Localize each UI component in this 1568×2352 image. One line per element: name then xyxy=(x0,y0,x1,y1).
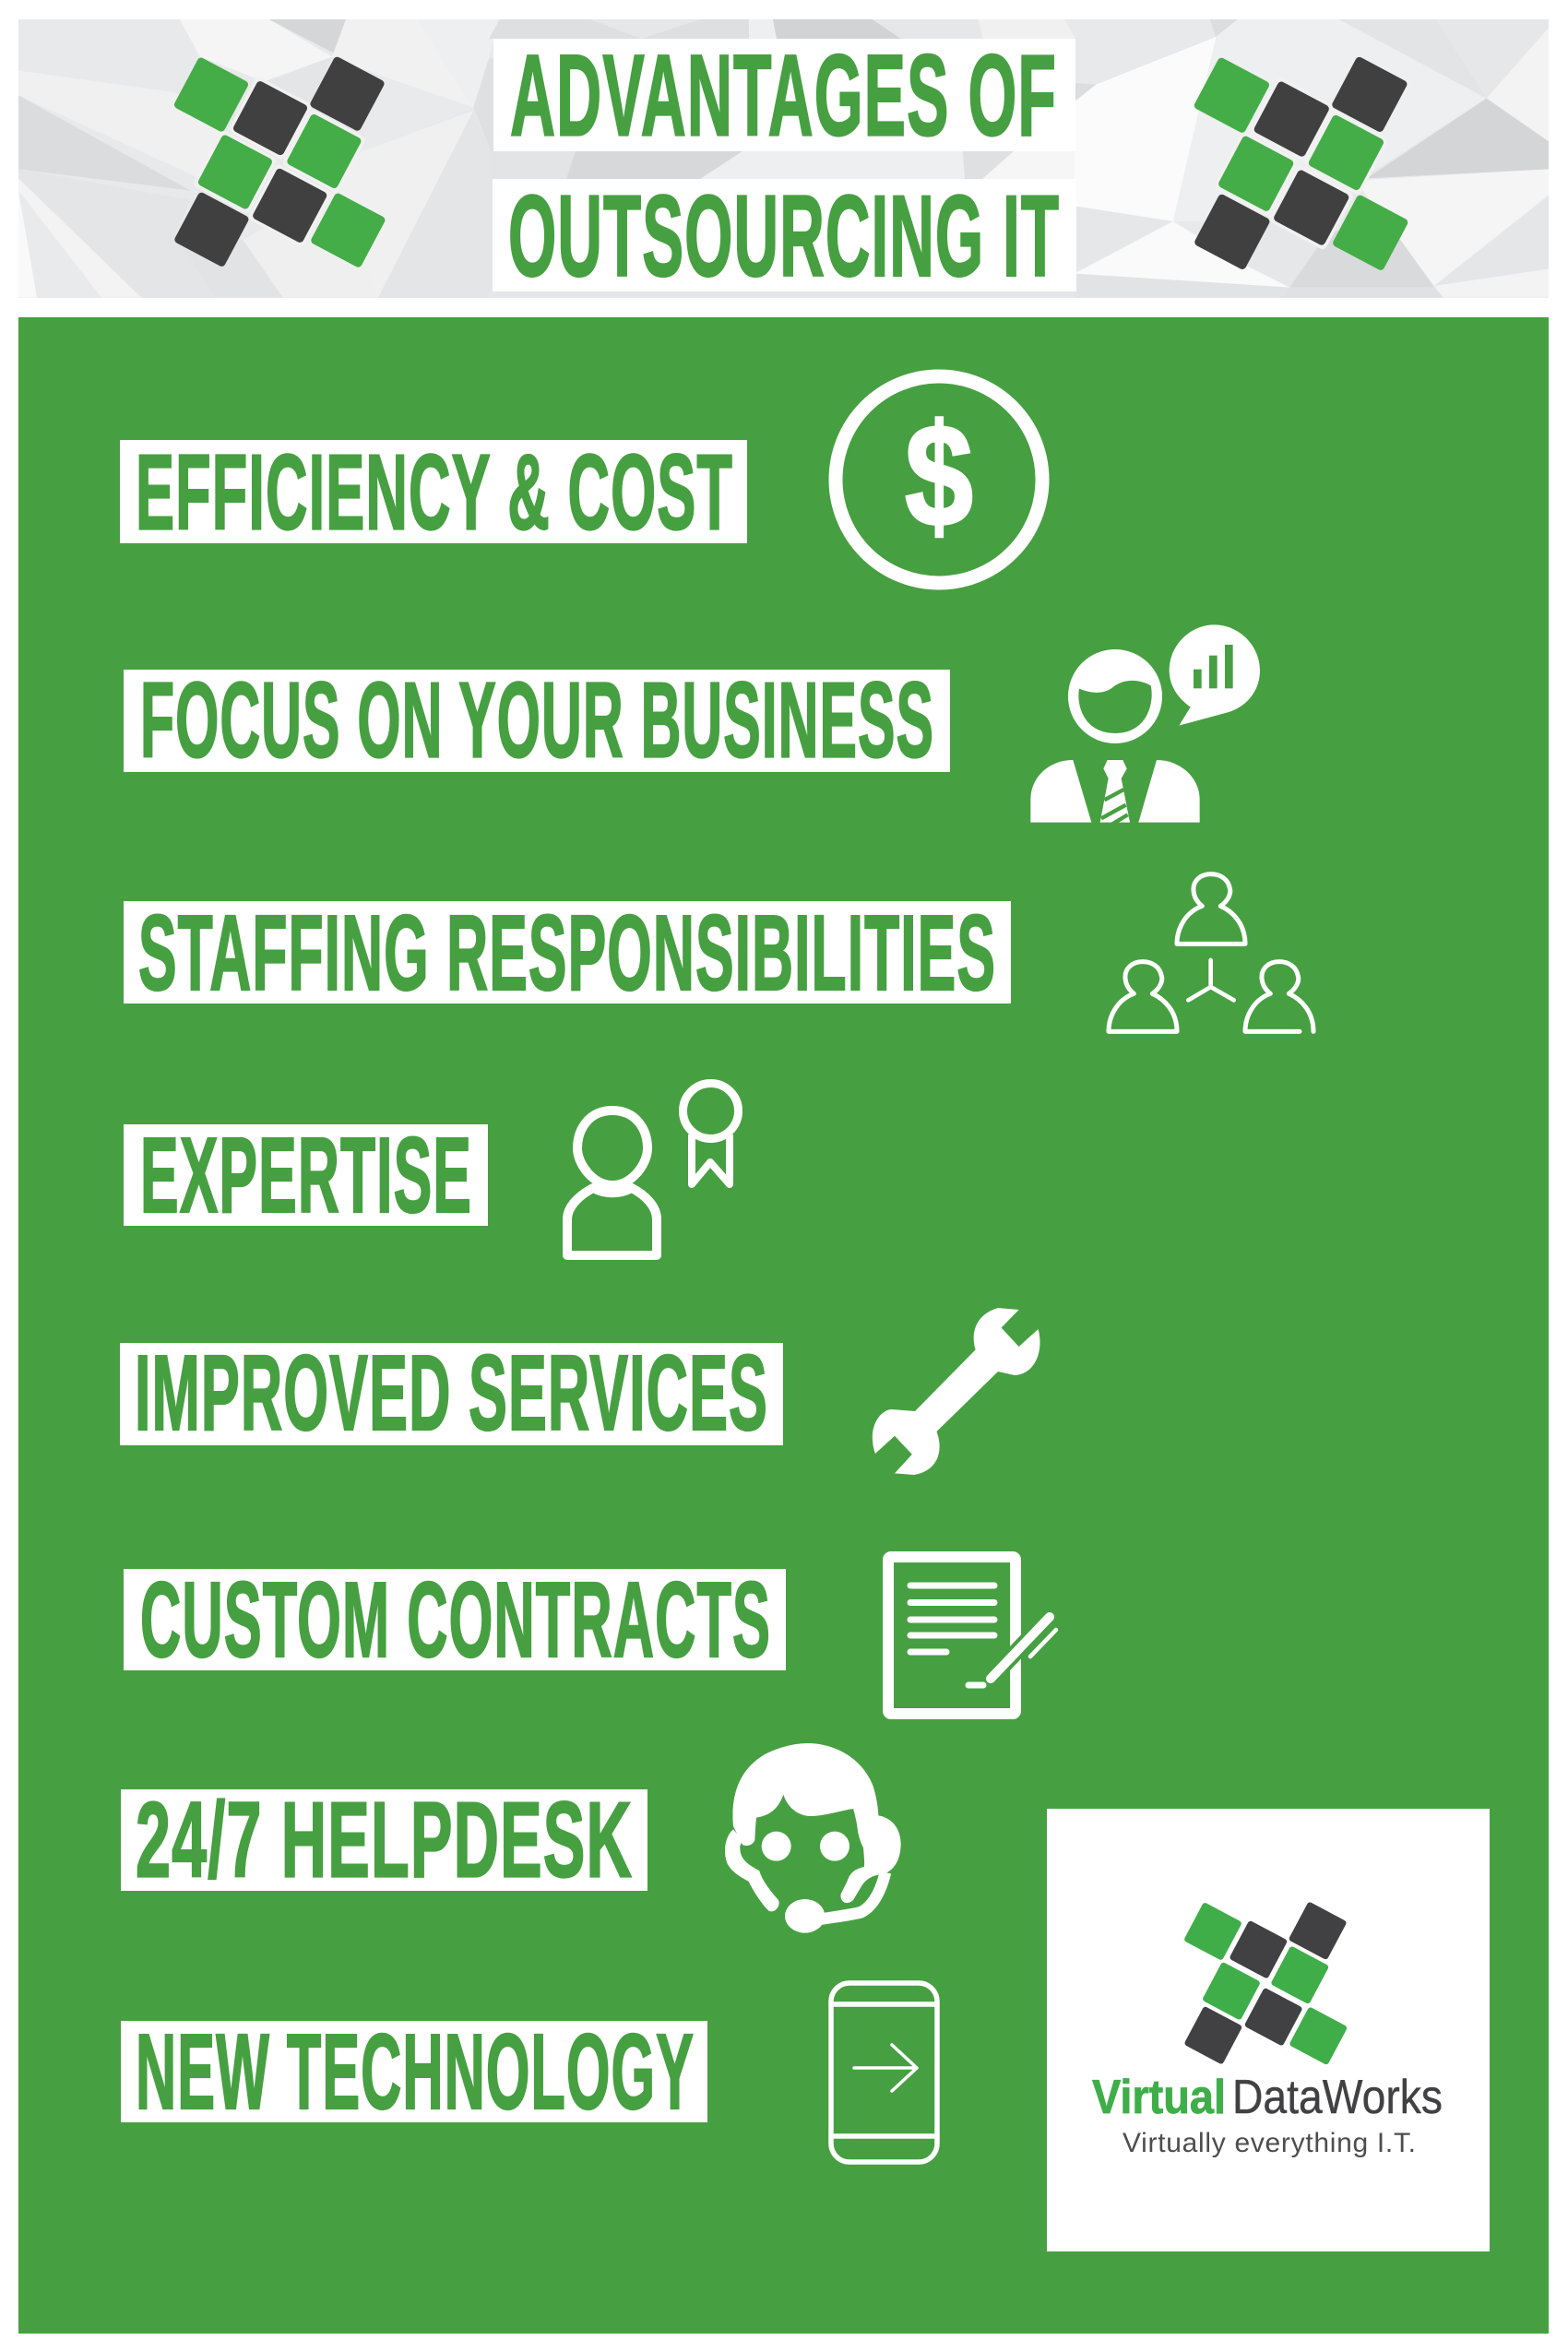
icon: header logo left xyxy=(172,55,386,268)
label: 24/7 helpdesk xyxy=(121,1780,647,1900)
label: staffing responsibilities xyxy=(124,893,1011,1013)
panel: company logo card xyxy=(1047,1809,1490,2251)
title line 1: ADVANTAGES OF xyxy=(510,31,1057,160)
label: custom contracts: CUSTOM CONTRACTS xyxy=(140,1560,771,1680)
label: efficiency and cost: EFFICIENCY & COST xyxy=(136,432,733,552)
label: custom contracts xyxy=(124,1560,786,1680)
icon: header logo right xyxy=(1193,55,1409,271)
label: new technology: NEW TECHNOLOGY xyxy=(136,2012,695,2132)
icon: businessman with chart bubble xyxy=(1030,624,1260,825)
label: improved services: IMPROVED SERVICES xyxy=(135,1333,768,1453)
title line 2: OUTSOURCING IT xyxy=(508,172,1060,301)
header banner xyxy=(18,19,1549,298)
label: expertise: EXPERTISE xyxy=(140,1115,472,1235)
label: focus on your business xyxy=(124,660,950,780)
icon: wrench xyxy=(873,1308,1040,1475)
company tagline: Virtually everything I.T. xyxy=(1123,2128,1416,2158)
icon: phone with arrow xyxy=(831,1983,937,2162)
company name xyxy=(1092,2071,1443,2124)
label: efficiency and cost xyxy=(120,432,747,552)
title line 1 xyxy=(493,31,1075,160)
company name: Virtual xyxy=(1092,2071,1226,2124)
icon: helpdesk agent with headset xyxy=(725,1743,901,1933)
icon: three connected people xyxy=(1109,874,1313,1031)
label: expertise xyxy=(124,1115,488,1235)
label: new technology xyxy=(121,2012,707,2132)
icon: company logo mark xyxy=(1183,1901,1348,2065)
title line 2 xyxy=(493,172,1076,301)
icon: dollar coin: $ xyxy=(905,394,973,557)
company name: DataWorks xyxy=(1232,2071,1443,2124)
label: 24/7 helpdesk: 24/7 HELPDESK xyxy=(136,1780,633,1900)
icon: contract and pen xyxy=(888,1557,1056,1714)
icon: expert person with ribbon xyxy=(567,1083,738,1255)
label: improved services xyxy=(120,1333,783,1453)
icon: dollar coin xyxy=(836,376,1042,583)
